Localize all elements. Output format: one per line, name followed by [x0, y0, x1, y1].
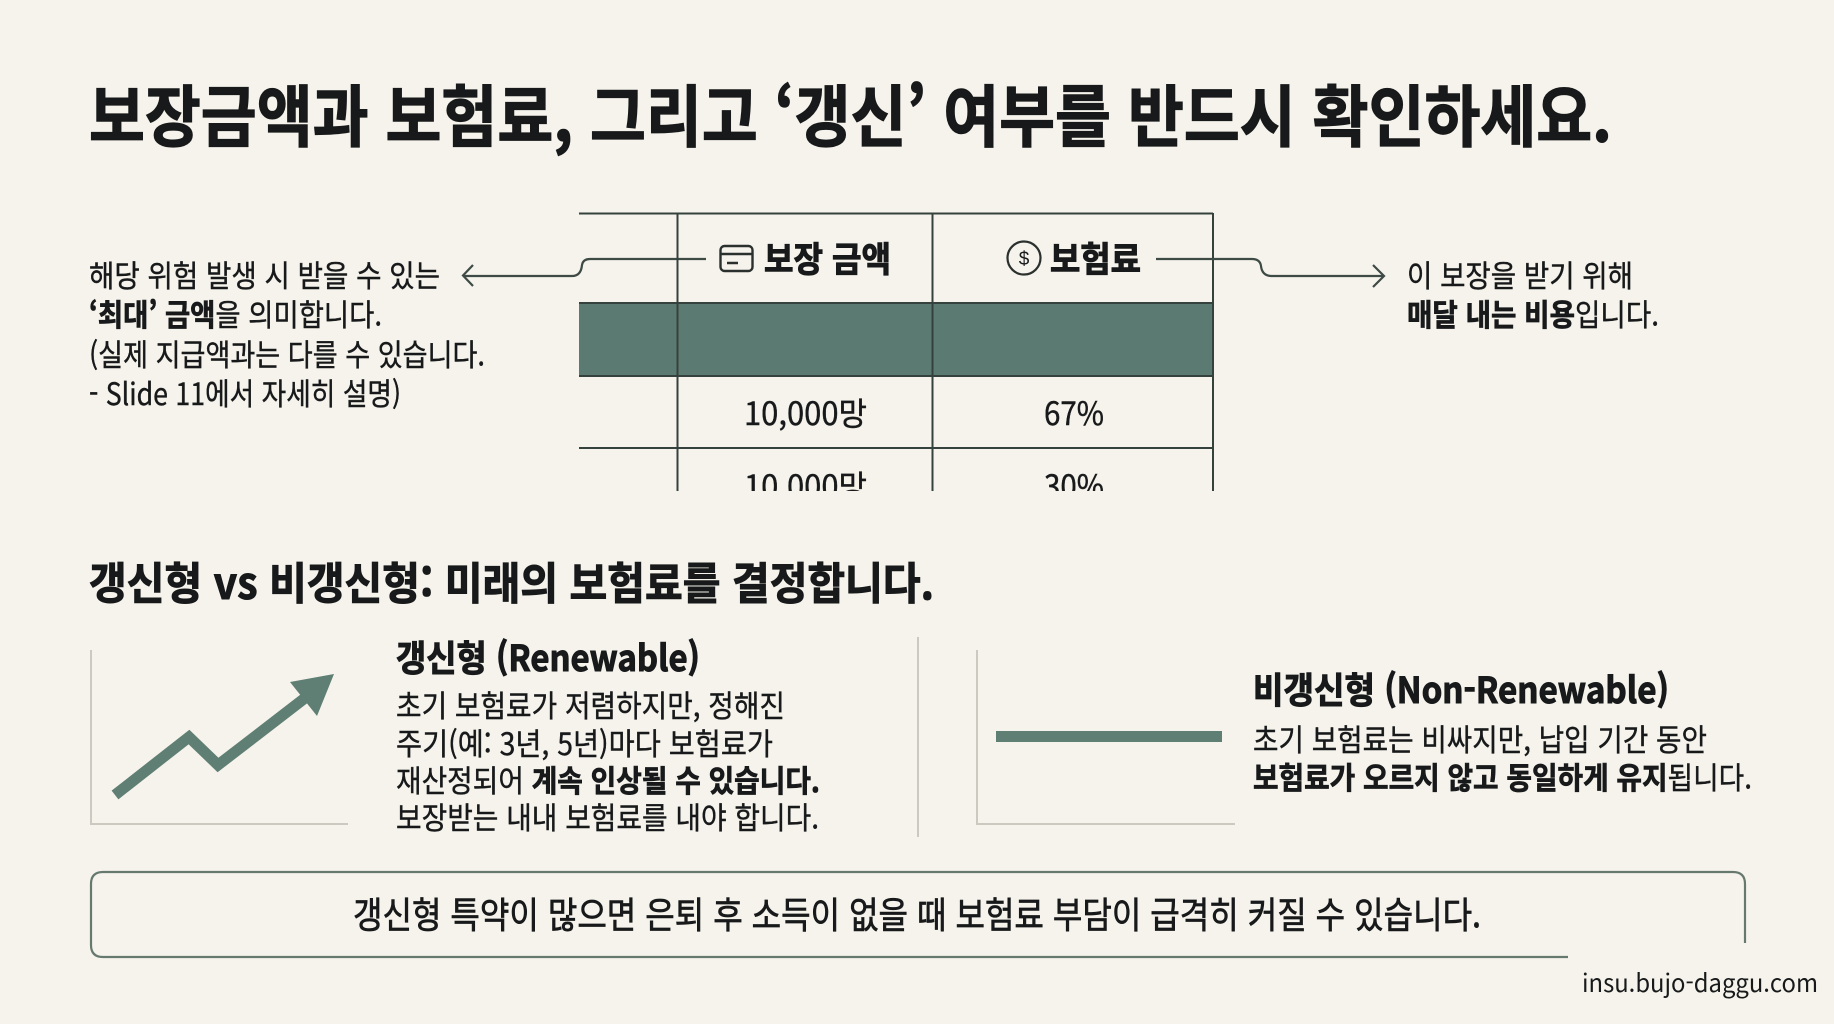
- table band: [579, 303, 1213, 376]
- table header: coverage amount: [719, 242, 889, 276]
- table row 2: 10,000망: [744, 462, 867, 508]
- chart: flat premium: [977, 650, 1235, 824]
- text: renewable description: [396, 682, 820, 838]
- table row 1: 67%: [1044, 389, 1104, 435]
- note: coverage amount explanation: (실제 지급액과는 다를 수 있습니다.: [89, 331, 485, 375]
- chart: rising premium: [91, 650, 348, 824]
- note: premium explanation: 이 보장을 받기 위해: [1407, 252, 1633, 296]
- text: renewable description: 재산정되어 계속 인상될 수 있습니다.: [396, 757, 820, 801]
- note: premium explanation: 매달 내는 비용입니다.: [1407, 291, 1659, 335]
- table: [579, 213, 1213, 508]
- table header: premium: [1006, 240, 1140, 276]
- note: coverage amount explanation: 해당 위험 발생 시 받을 수 있는: [89, 252, 440, 296]
- text: renewable description: 보장받는 내내 보험료를 내야 합니다.: [396, 794, 819, 838]
- note: premium explanation: [1407, 252, 1659, 335]
- title: 보장금액과 보험료, 그리고 ‘갱신’ 여부를 반드시 확인하세요.: [89, 64, 1612, 161]
- text: renewable description: 초기 보험료가 저렴하지만, 정해진: [396, 682, 785, 726]
- watermark: insu.bujo-daggu.com: [1582, 964, 1818, 1000]
- section heading: 갱신형 vs 비갱신형: 미래의 보험료를 결정합니다.: [89, 548, 934, 612]
- table row 2: 30%: [1044, 462, 1104, 508]
- note: coverage amount explanation: [89, 252, 485, 414]
- icon: dollar coin: $: [1019, 249, 1030, 270]
- table row 1: 10,000망: [744, 389, 867, 435]
- table header: coverage amount: 보장 금액: [764, 232, 891, 283]
- callout text: 갱신형 특약이 많으면 은퇴 후 소득이 없을 때 보험료 부담이 급격히 커질 수 있습니다.: [353, 886, 1481, 939]
- text: non-renewable description: 초기 보험료는 비싸지만, 납입 기간 동안: [1253, 716, 1707, 760]
- text: renewable description: 주기(예: 3년, 5년)마다 보험료가: [396, 720, 773, 764]
- heading: renewable: 갱신형 (Renewable): [396, 630, 700, 682]
- icon: card: [720, 246, 752, 271]
- table header: premium: 보험료: [1050, 232, 1141, 283]
- arrow: left leader from coverage header to note: [463, 259, 706, 286]
- text: non-renewable description: [1253, 716, 1752, 798]
- table row 1: [746, 398, 1103, 431]
- callout box: [91, 872, 1745, 957]
- note: coverage amount explanation: - Slide 11에서 자세히 설명): [89, 370, 401, 414]
- arrow: right leader from premium header to note: [1156, 259, 1384, 287]
- note: coverage amount explanation: ‘최대’ 금액을 의미합니다.: [89, 291, 382, 335]
- text: non-renewable description: 보험료가 오르지 않고 동일하게 유지됩니다.: [1253, 754, 1752, 798]
- heading: non-renewable: 비갱신형 (Non-Renewable): [1253, 662, 1669, 714]
- table row 2: [748, 471, 1103, 491]
- panel: renewable: [91, 630, 820, 838]
- panel: non-renewable: [977, 650, 1752, 824]
